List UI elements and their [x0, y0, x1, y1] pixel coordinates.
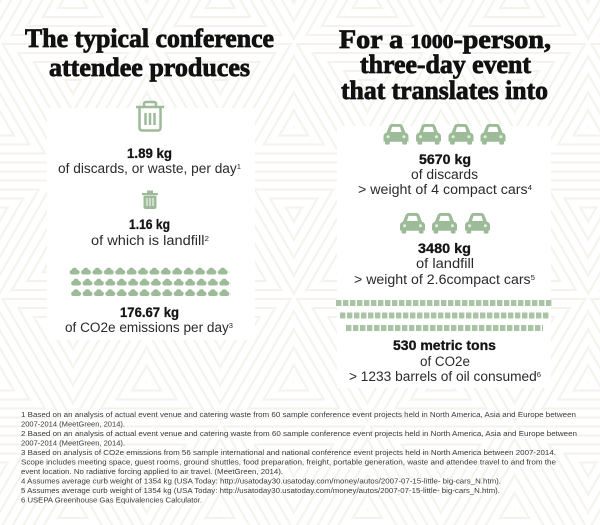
heading: 1000-person event: [339, 25, 551, 105]
stat: 5670 kg discards: of discards: [411, 167, 478, 182]
footnotes text block: 2 Based on an analysis of actual event venue and catering waste from 60 sample conference event projects held in North America, Asia and Europe between: [21, 431, 577, 438]
footnotes text block: 2007-2014 (MeetGreen, 2014).: [21, 422, 125, 428]
stat: 5670 kg discards: [358, 152, 532, 197]
stat: 530 metric tons CO2e: [349, 338, 541, 384]
footnotes text block: 3 Based on analysis of CO2e emissions from 56 sample international and national conference event projects held in North America between 2007-2014.: [21, 450, 556, 457]
stat: 530 metric tons CO2e: of CO2e: [420, 354, 470, 369]
stat: 1.89 kg discards: of discards, or waste, per day: [58, 161, 234, 176]
stat: 1.16 kg landfill: of which is landfill: [91, 233, 196, 248]
footnotes text block: Scope includes meeting space, guest rooms, ground shuttles, food preparation, freight, portable generation, waste and attendee travel to and from the: [21, 460, 556, 466]
stat: 176.67 kg CO2e: [65, 305, 233, 335]
stat: 5670 kg discards: 5670 kg: [419, 152, 471, 167]
stat: 530 metric tons CO2e: 6: [537, 370, 541, 379]
icon row: four cars: [384, 124, 506, 145]
panel: left white backing: [47, 108, 255, 340]
icon: large trash can: [136, 102, 164, 130]
footnotes text block: 6 USEPA Greenhouse Gas Equivalencies Calculator.: [21, 498, 202, 504]
stat: 176.67 kg CO2e: of CO2e emissions per day: [65, 320, 228, 335]
stat: 1.89 kg discards: 1: [237, 162, 241, 171]
heading: 1000-person event: that translates into: [341, 76, 548, 105]
stat: 1.16 kg landfill: 2: [204, 234, 209, 243]
icon grid: oil barrels: [336, 300, 553, 331]
heading: typical attendee: attendee produces: [49, 53, 250, 82]
icon row: three cars: [400, 213, 490, 234]
heading: typical attendee: [25, 24, 274, 82]
footnotes text block: 1 Based on an analysis of actual event venue and catering waste from 60 sample conference event projects held in North America, Asia and Europe between: [21, 412, 576, 419]
stat: 530 metric tons CO2e: > 1233 barrels of oil consumed: [349, 369, 534, 384]
stat: 5670 kg discards: > weight of 4 compact cars: [358, 182, 519, 197]
stat: 1.16 kg landfill: 1.16 kg: [129, 217, 170, 232]
heading: typical attendee: The typical conference: [25, 24, 274, 53]
footnotes text block: [21, 412, 577, 504]
stat: 1.16 kg landfill: [91, 217, 209, 248]
stat: 176.67 kg CO2e: 176.67 kg: [120, 305, 179, 320]
footnotes text block: 2007-2014 (MeetGreen, 2014).: [21, 440, 125, 448]
stat: 3480 kg landfill: [354, 241, 535, 287]
footnotes text block: 5 Assumes average curb weight of 1354 kg (USA Today: http://usatoday30.usatoday.com/money/autos/2007-07-15-little- big-cars_N.htm).: [21, 488, 500, 495]
left column: [25, 24, 274, 335]
stat: 530 metric tons CO2e: 530 metric tons: [393, 338, 496, 353]
stat: 3480 kg landfill: 5: [531, 273, 535, 282]
heading: 1000-person event: three-day event: [360, 50, 531, 79]
stat: 1.89 kg discards: [58, 146, 241, 176]
icon: small trash can: [142, 190, 158, 209]
stat: 1.89 kg discards: 1.89 kg: [127, 146, 172, 161]
stat: 5670 kg discards: 4: [528, 183, 532, 192]
right column: [336, 25, 553, 384]
stat: 3480 kg landfill: 3480 kg: [418, 241, 471, 256]
stat: 3480 kg landfill: > weight of 2.6compact cars: [354, 272, 522, 287]
heading: 1000-person event: For a 1000-person,: [339, 25, 551, 54]
stat: 176.67 kg CO2e: 3: [229, 321, 233, 330]
footnotes text block: 4 Assumes average curb weight of 1354 kg (USA Today: http://usatoday30.usatoday.com/money/autos/2007-07-15-little- big-cars_N.htm).: [21, 478, 501, 486]
icon grid: clouds: [70, 267, 231, 296]
panel: right white backing: [337, 126, 551, 388]
footnotes text block: event location. No radiative forcing applied to air travel. (MeetGreen, 2014).: [21, 469, 283, 476]
stat: 3480 kg landfill: of landfill: [416, 256, 474, 271]
